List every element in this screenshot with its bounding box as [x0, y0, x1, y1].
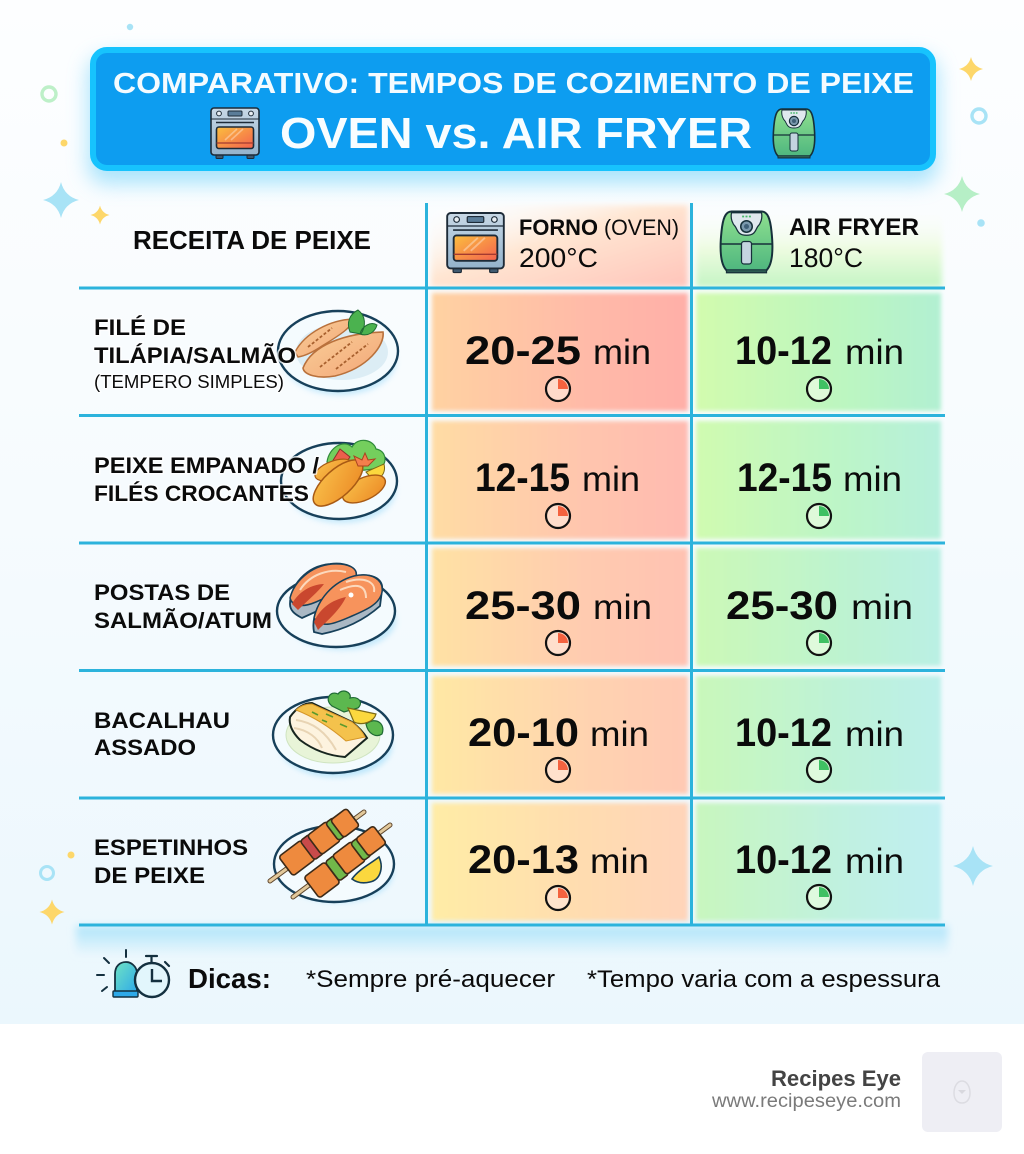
row 5 recipe name: DE PEIXE [94, 863, 205, 888]
icon: alarm and stopwatch [97, 950, 169, 997]
title line 2: OVEN vs. AIR FRYER [280, 109, 752, 158]
oven time row 2 [475, 456, 640, 528]
tips row [97, 950, 940, 997]
heading: recipe column: RECEITA DE PEIXE [133, 225, 371, 255]
air fryer time cells [696, 293, 941, 921]
column header backgrounds [431, 205, 942, 287]
oven time row 3: min [593, 588, 652, 627]
tip two: *Tempo varia com a espessura [587, 966, 940, 993]
icon: timer [807, 504, 831, 528]
air fryer time row 2: min [843, 460, 902, 499]
row 2 recipe name [94, 453, 320, 506]
footer brand [711, 1052, 1002, 1132]
column header: air fryer: AIR FRYER [789, 214, 919, 241]
icon: timer [546, 631, 570, 655]
column header: oven [447, 213, 679, 273]
air fryer time row 2: 12-15 [737, 456, 832, 500]
air fryer time row 5: 10-12 [735, 838, 832, 882]
row 4 recipe name [94, 708, 230, 760]
row 2 recipe name: PEIXE EMPANADO / [94, 453, 320, 478]
row 3 recipe name [94, 580, 272, 633]
row 1 recipe name [94, 315, 296, 392]
row 3 plate: salmon steaks [277, 564, 396, 650]
air fryer time row 4: 10-12 [735, 711, 832, 755]
row 4 plate: baked cod [273, 691, 393, 777]
icon: air fryer small [773, 109, 815, 158]
row 5 plate: fish skewers [270, 808, 394, 902]
glow below table [76, 926, 948, 956]
icon: timer [546, 758, 570, 782]
icon: timer [807, 885, 831, 909]
title banner [88, 50, 938, 184]
oven time row 5: 20-13 [468, 838, 579, 882]
air fryer time row 3: min [851, 588, 913, 627]
air fryer time row 4 [735, 711, 904, 782]
icon: timer [807, 758, 831, 782]
icon: oven [447, 213, 504, 273]
oven time row 2: min [582, 460, 640, 499]
air fryer time row 2 [737, 456, 902, 528]
oven time row 4: min [590, 715, 649, 754]
air fryer time row 3 [726, 584, 913, 655]
icon: timer [546, 886, 570, 910]
row 3 recipe name: SALMÃO/ATUM [94, 608, 272, 633]
column header: oven: 200°C [519, 243, 598, 273]
column header: air fryer: 180°C [789, 243, 863, 273]
tip one: *Sempre pré-aquecer [306, 966, 555, 993]
oven time row 4: 20-10 [468, 711, 579, 755]
row 4 recipe name: BACALHAU [94, 708, 230, 733]
air fryer time row 3: 25-30 [726, 584, 838, 628]
air fryer time row 5 [735, 838, 904, 909]
icon: timer [546, 377, 570, 401]
column header: oven: FORNO [519, 215, 598, 240]
title line 1: COMPARATIVO: TEMPOS DE COZIMENTO DE PEIXE [113, 68, 914, 100]
row 2 recipe name: FILÉS CROCANTES [94, 481, 309, 506]
oven time cells [432, 293, 688, 921]
row 2 plate: breaded fish [281, 440, 397, 523]
oven time row 5 [468, 838, 649, 910]
oven time row 3 [465, 584, 652, 655]
label: dicas: Dicas: [188, 963, 271, 994]
row 1 recipe name: FILÉ DE [94, 315, 186, 340]
oven time row 4 [468, 711, 649, 782]
oven time row 2: 12-15 [475, 456, 570, 500]
table grid [79, 203, 945, 925]
row 1 plate: grilled fillets [278, 310, 398, 395]
row 1 recipe name: TILÁPIA/SALMÃO [94, 343, 296, 368]
oven time row 1: 20-25 [465, 329, 581, 373]
row 4 recipe name: ASSADO [94, 735, 196, 760]
air fryer time row 1 [735, 329, 904, 401]
icon: oven small [211, 108, 259, 158]
oven time row 3: 25-30 [465, 584, 581, 628]
row 5 recipe name: ESPETINHOS [94, 835, 248, 860]
column header: oven: (OVEN) [604, 215, 679, 240]
row 5 recipe name [94, 835, 248, 888]
icon: air fryer [721, 212, 772, 273]
icon: timer [807, 631, 831, 655]
decorative sparkles and rings [40, 24, 993, 925]
icon: timer [807, 377, 831, 401]
air fryer time row 1: 10-12 [735, 329, 832, 373]
brand name: Recipes Eye [771, 1066, 901, 1091]
oven time row 1: min [593, 333, 651, 372]
air fryer time row 1: min [845, 333, 904, 372]
air fryer time row 4: min [845, 715, 904, 754]
air fryer time row 5: min [845, 842, 904, 881]
row 1 recipe name: (TEMPERO SIMPLES) [94, 371, 284, 392]
oven time row 1 [465, 329, 651, 401]
logo placeholder [922, 1052, 1002, 1132]
column header: air fryer [721, 212, 919, 273]
row 3 recipe name: POSTAS DE [94, 580, 230, 605]
icon: timer [546, 504, 570, 528]
oven time row 5: min [590, 842, 649, 881]
brand url: www.recipeseye.com [711, 1090, 901, 1112]
